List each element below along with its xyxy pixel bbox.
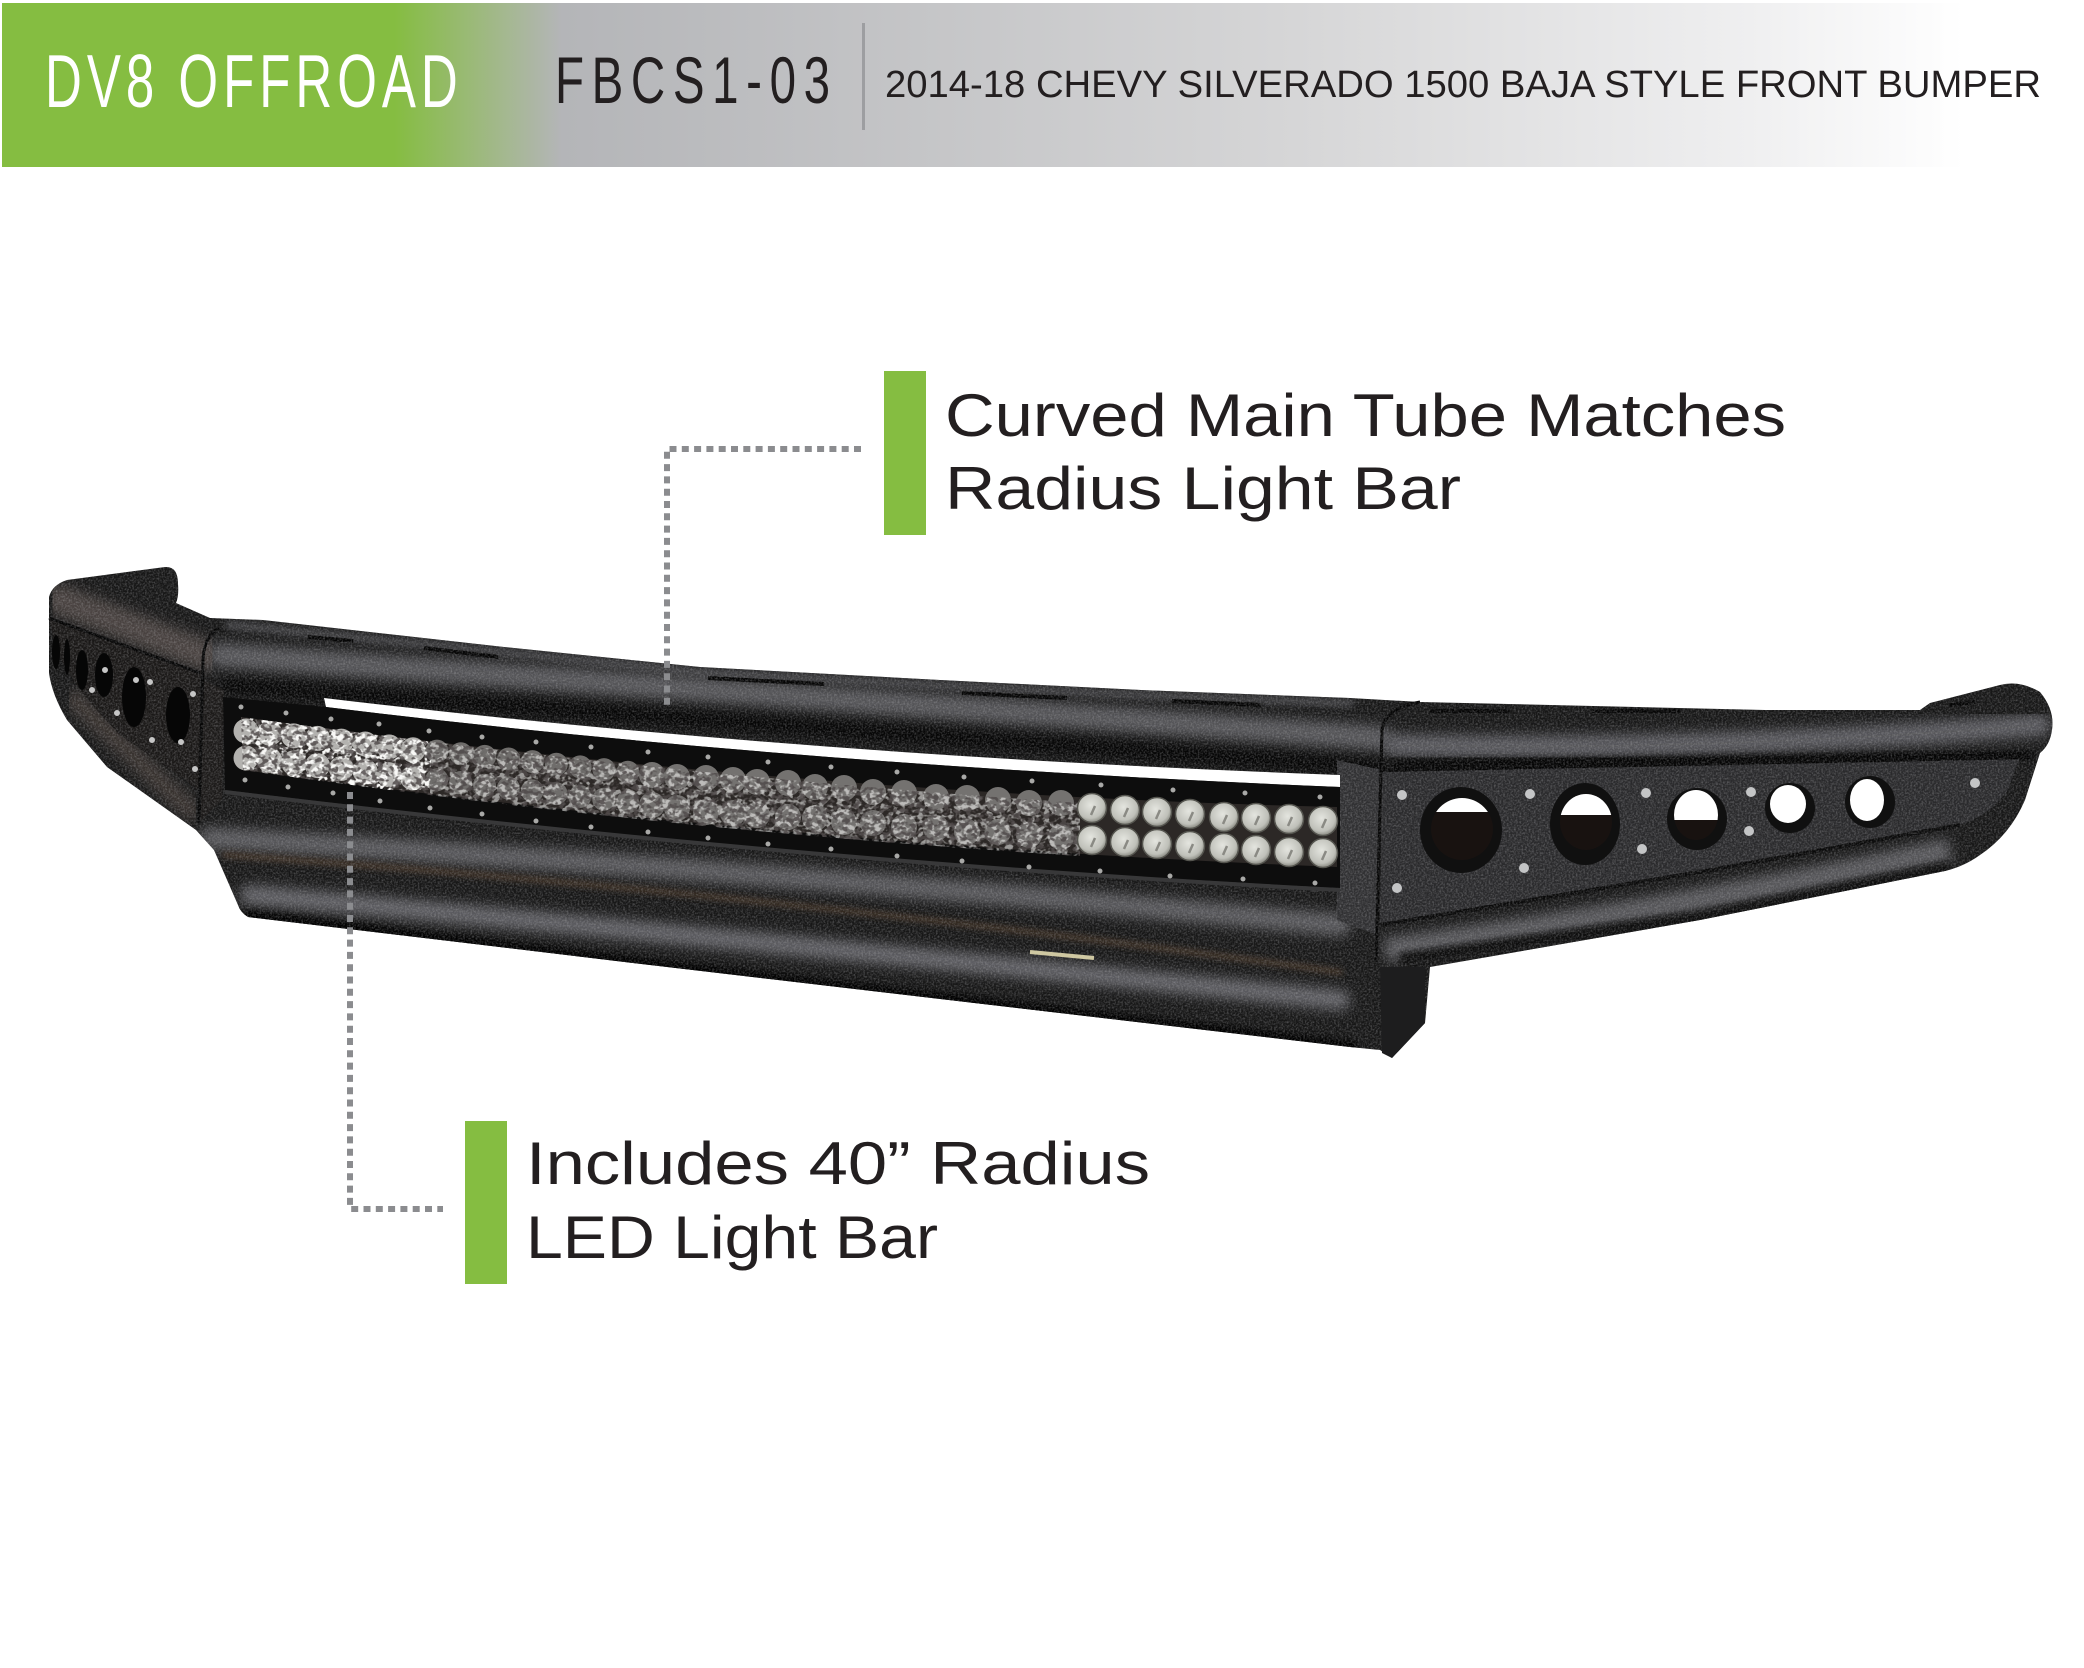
mounting bracket detail (1380, 967, 1425, 1058)
part number: FBCS1-03 (555, 44, 830, 118)
callout text: Radius Light Bar (945, 455, 1461, 522)
bumper silhouette (49, 567, 2052, 1058)
right plate bolts (1397, 783, 1975, 888)
callout text (526, 1130, 1150, 1271)
top surface slots (308, 637, 1975, 711)
callout: LED light bar (350, 792, 1150, 1284)
seams (49, 618, 2030, 962)
left plate bolts (92, 670, 195, 769)
callout: curved main tube (667, 371, 1786, 705)
left side plate (49, 618, 200, 790)
left plate holes (52, 635, 190, 743)
LEDs: middle section (652, 775, 1061, 837)
callout text: Includes 40” Radius (526, 1130, 1150, 1197)
LEDs: left bright section (246, 731, 652, 805)
bumper illustration (40, 560, 2060, 1060)
light bar housing (223, 697, 1340, 890)
LED lens details (1091, 806, 1326, 860)
center vertical brackets (199, 680, 1382, 935)
right side plate (1380, 757, 2020, 925)
housing bolts (241, 707, 1320, 883)
lower right tube shading (1380, 825, 1960, 960)
leader line (350, 792, 443, 1209)
green bar (884, 371, 926, 535)
callout text: Curved Main Tube Matches (945, 382, 1786, 449)
LED backing (241, 717, 1337, 867)
bronze glint on lower tube (1030, 952, 1094, 958)
LED mottling (241, 710, 1080, 860)
product title: 2014-18 CHEVY SILVERADO 1500 BAJA STYLE FRONT BUMPER (885, 64, 2041, 106)
leader line (667, 449, 861, 705)
brand name: DV8 OFFROAD (45, 39, 458, 123)
green bar (465, 1121, 507, 1284)
callout text: LED Light Bar (526, 1204, 938, 1271)
right plate holes (1420, 776, 1895, 873)
LEDs: right bright section (1078, 794, 1338, 868)
header band (2, 3, 2084, 167)
powder coat texture (40, 560, 2060, 1060)
callout text (945, 382, 1786, 522)
light slit behind tube (324, 698, 1340, 787)
tube shading (60, 600, 2040, 1048)
